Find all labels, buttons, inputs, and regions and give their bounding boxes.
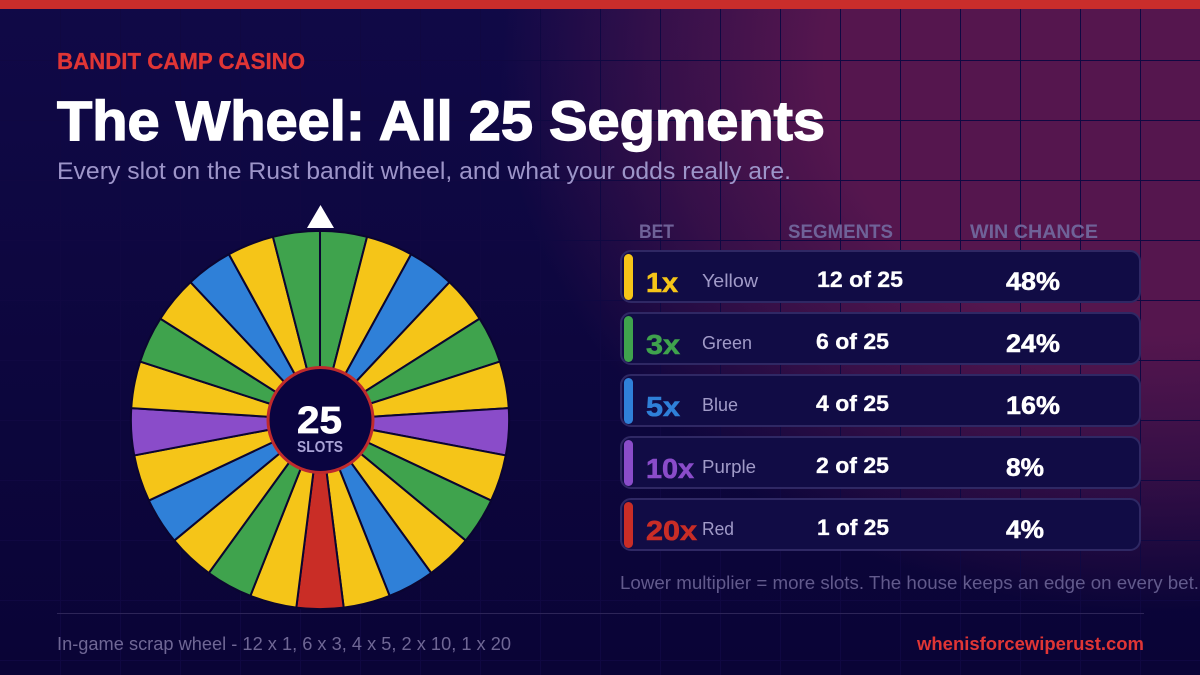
wheel hub: 25 <box>297 400 342 442</box>
row: red 20x: 1 of 25 <box>817 515 889 540</box>
row: yellow 1x: 48% <box>1006 268 1060 296</box>
row: blue 5x: 5x <box>646 391 680 422</box>
table note: Lower multiplier = more slots. The house keeps an edge on every bet. <box>620 573 1199 593</box>
row: green 3x: Green <box>702 333 752 353</box>
row: yellow 1x: Yellow <box>702 271 759 291</box>
footer site link: whenisforcewiperust.com <box>916 633 1144 654</box>
row: blue 5x: 16% <box>1006 392 1060 420</box>
row: green 3x: 24% <box>1006 330 1060 358</box>
row: yellow 1x <box>621 251 1140 302</box>
row: green 3x <box>621 313 1140 364</box>
row: green 3x: 3x <box>646 329 680 360</box>
row: blue 5x <box>621 375 1140 426</box>
table header: BET <box>639 222 674 243</box>
row: blue 5x: 4 of 25 <box>816 391 889 416</box>
subtitle: Every slot on the Rust bandit wheel, and what your odds really are. <box>57 158 791 185</box>
row: red 20x: 20x <box>646 515 697 546</box>
row: green 3x: 6 of 25 <box>816 329 889 354</box>
footer note: In-game scrap wheel - 12 x 1, 6 x 3, 4 x 5, 2 x 10, 1 x 20 <box>57 634 511 654</box>
row: purple 10x: 10x <box>646 453 694 484</box>
table header <box>639 222 1098 243</box>
table header: SEGMENTS <box>788 222 893 243</box>
row: red 20x <box>621 499 1140 550</box>
row: red 20x: 4% <box>1006 516 1044 544</box>
row: red 20x: Red <box>702 519 734 539</box>
wheel <box>131 231 509 609</box>
row: yellow 1x: 1x <box>646 267 678 298</box>
row: blue 5x: Blue <box>702 395 738 415</box>
row: purple 10x: 2 of 25 <box>816 453 889 478</box>
table header: WIN CHANCE <box>970 222 1098 243</box>
row: yellow 1x: 12 of 25 <box>817 267 903 292</box>
top accent bar <box>0 0 1200 9</box>
wheel hub: SLOTS <box>297 439 343 456</box>
eyebrow: BANDIT CAMP CASINO <box>57 48 305 74</box>
row: purple 10x <box>621 437 1140 488</box>
title: The Wheel: All 25 Segments <box>57 89 825 152</box>
icon: wheel pointer <box>307 205 334 228</box>
wheel segments <box>131 231 509 609</box>
row: purple 10x: Purple <box>702 457 756 477</box>
row: purple 10x: 8% <box>1006 454 1044 482</box>
wheel hub <box>268 368 373 472</box>
